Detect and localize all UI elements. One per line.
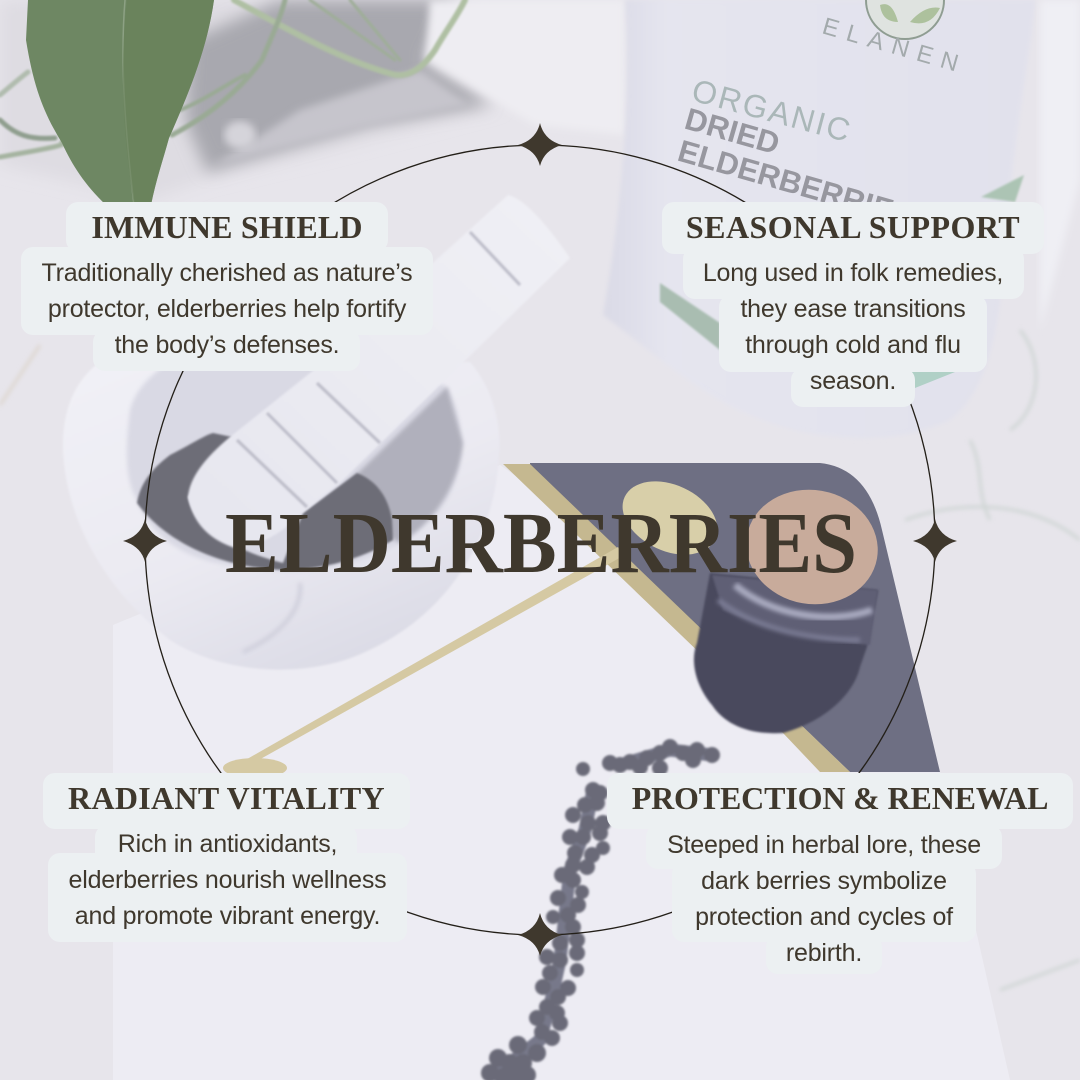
panel: radiant vitality <box>43 773 407 942</box>
text: protection and renewal: Steeped in herbal lore, these <box>667 831 981 859</box>
jar with cork <box>694 479 887 733</box>
text: immune shield <box>42 259 412 359</box>
main title: ELDERBERRIES <box>225 494 857 591</box>
text: immune shield: protector, elderberries help fortify <box>48 295 406 323</box>
text: radiant vitality: Rich in antioxidants, <box>118 830 337 858</box>
elderberry bag: ELANEN <box>819 13 961 77</box>
star: left <box>123 519 167 562</box>
text: protection and renewal: dark berries symbolize <box>701 867 947 895</box>
spoon <box>223 467 729 778</box>
heading: immune shield: IMMUNE SHIELD <box>91 209 363 245</box>
plant stems <box>0 0 465 157</box>
text: immune shield: Traditionally cherished as nature’s <box>42 259 412 287</box>
text: seasonal support: season. <box>810 367 896 395</box>
text: immune shield: the body’s defenses. <box>115 331 339 359</box>
text: radiant vitality <box>69 830 386 930</box>
black stone slab <box>530 463 940 772</box>
elderberry bag: ELDERBERRIES <box>674 133 917 234</box>
text: protection and renewal: protection and cycles of <box>695 903 953 931</box>
heading: protection and renewal: PROTECTION & RENEWAL <box>632 780 1048 816</box>
star: bottom <box>518 913 562 956</box>
top-left backdrop shading <box>0 0 625 200</box>
text: seasonal support <box>703 259 1003 395</box>
elderberry bag <box>603 0 1080 438</box>
circle ring <box>145 145 935 935</box>
marble board <box>113 465 1010 1080</box>
berries in bowl <box>137 433 393 570</box>
mortar bowl <box>63 362 499 670</box>
icon: plant leaf <box>26 0 214 205</box>
scattered berries <box>481 739 720 1080</box>
heading: seasonal support: SEASONAL SUPPORT <box>686 209 1020 245</box>
elderberry bag: DRIED <box>681 101 783 161</box>
star: top <box>518 123 562 166</box>
panel: protection and renewal <box>607 773 1073 967</box>
elderberry bag: ORGANIC <box>688 72 854 149</box>
floor marble veins <box>0 330 1080 990</box>
text: seasonal support: through cold and flu <box>745 331 961 359</box>
text: protection and renewal <box>667 831 981 967</box>
text: seasonal support: they ease transitions <box>740 295 966 323</box>
text: protection and renewal: rebirth. <box>786 939 862 967</box>
panel: immune shield <box>21 202 433 371</box>
brass strip <box>503 464 850 772</box>
text: radiant vitality: elderberries nourish wellness <box>69 866 386 894</box>
star: right <box>913 519 957 562</box>
text: seasonal support: Long used in folk remedies, <box>703 259 1003 287</box>
pestle <box>188 195 570 548</box>
heading: radiant vitality: RADIANT VITALITY <box>68 780 385 816</box>
text: radiant vitality: and promote vibrant energy. <box>75 902 380 930</box>
panel: seasonal support <box>662 202 1037 407</box>
